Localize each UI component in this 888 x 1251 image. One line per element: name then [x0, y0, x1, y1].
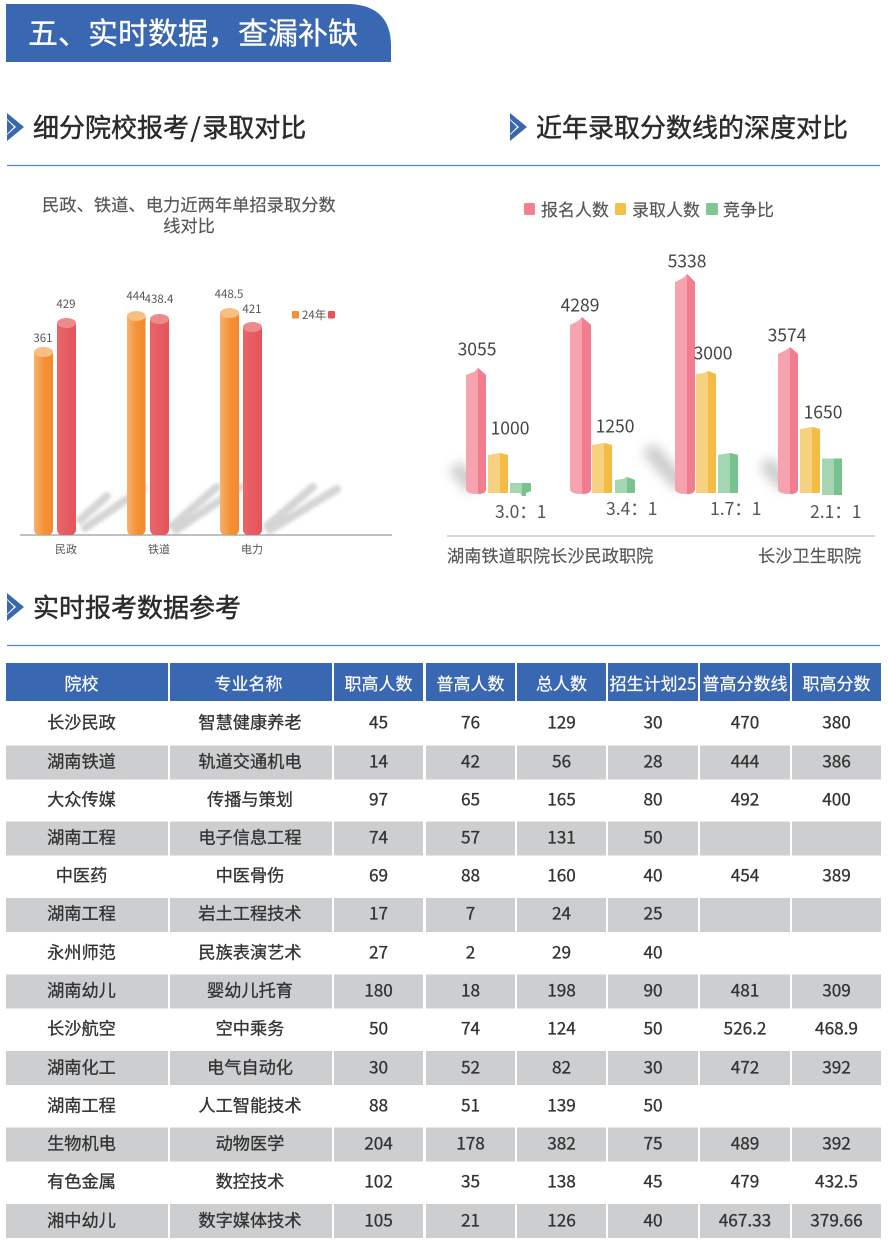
group: 湖南铁道职院: 1000	[491, 416, 529, 441]
table header: 总人数	[536, 670, 587, 695]
group: 长沙卫生职院	[768, 323, 862, 524]
row: 大众传媒: 165	[547, 786, 576, 811]
table header: 职高人数	[344, 670, 412, 695]
row: 湖南化工	[6, 1051, 881, 1085]
row: 大众传媒: 492	[731, 786, 759, 811]
row: 湖南铁道: 14	[369, 748, 388, 773]
group: 民政	[33, 296, 77, 557]
row: 生物机电: 382	[547, 1130, 576, 1155]
row: 永州师范: 永州师范	[47, 939, 116, 964]
row: 永州师范: 29	[552, 939, 571, 964]
group: 民政: 民政	[55, 541, 77, 557]
title banner: 五、实时数据，查漏补缺	[28, 9, 358, 53]
row: 长沙民政: 30	[643, 709, 663, 734]
group: 湖南铁道职院: 3055	[458, 337, 496, 362]
row: 中医药: 69	[369, 862, 388, 887]
table header	[6, 663, 881, 701]
row: 有色金属: 数控技术	[216, 1168, 284, 1193]
group: 长沙卫生职院: 3574	[768, 323, 807, 348]
row: 有色金属: 45	[643, 1168, 663, 1193]
category labels: 长沙卫生职院	[758, 542, 861, 567]
row: 湖南幼儿: 198	[547, 977, 576, 1002]
group: 电力: 电力	[241, 541, 263, 557]
row: 长沙航空: 468.9	[815, 1015, 858, 1040]
row: 湖南铁道: 28	[643, 748, 663, 773]
row: 湖南工程 电子信息工程: 电子信息工程	[198, 824, 302, 849]
row: 湖南幼儿: 481	[731, 977, 759, 1002]
row: 湘中幼儿: 467.33	[719, 1207, 771, 1232]
legend	[292, 307, 335, 323]
row: 中医药: 中医药	[56, 862, 107, 887]
row: 湖南铁道: 386	[822, 748, 851, 773]
row: 生物机电: 75	[643, 1130, 663, 1155]
row: 湖南化工: 30	[643, 1054, 663, 1079]
row: 湖南工程 人工智能技术	[47, 1092, 663, 1117]
bar chart: 报名人数与录取人数	[447, 249, 875, 567]
row: 湖南幼儿: 湖南幼儿	[47, 977, 116, 1002]
row: 生物机电: 生物机电	[47, 1130, 116, 1155]
row: 湖南工程 人工智能技术: 人工智能技术	[198, 1092, 302, 1117]
row: 湖南幼儿: 309	[822, 977, 851, 1002]
row: 有色金属: 35	[461, 1168, 480, 1193]
row: 湖南工程 岩土工程技术	[6, 898, 881, 932]
row: 长沙民政	[47, 709, 851, 734]
row: 长沙航空: 50	[643, 1015, 663, 1040]
row: 生物机电: 489	[731, 1130, 759, 1155]
category labels	[447, 542, 861, 567]
legend: right chart	[524, 196, 774, 221]
row: 生物机电: 178	[456, 1130, 485, 1155]
row: 大众传媒: 97	[369, 786, 388, 811]
row: 有色金属: 432.5	[815, 1168, 858, 1193]
row: 永州师范: 27	[369, 939, 388, 964]
row: 湖南工程 电子信息工程: 131	[547, 824, 576, 849]
group: 民政: 429	[56, 296, 76, 312]
left chart title: 民政、铁道、电力近两年单招录取分数	[42, 191, 336, 216]
row: 长沙航空: 124	[547, 1015, 576, 1040]
row: 湖南工程 岩土工程技术: 17	[369, 900, 388, 925]
row: 湘中幼儿: 126	[547, 1207, 576, 1232]
bar chart: 单招录取分数线对比	[20, 286, 392, 557]
group: 湖南铁道职院: 3.0：1	[495, 499, 547, 524]
title banner	[6, 4, 391, 62]
legend: right chart: 录取人数	[632, 196, 700, 221]
row: 湘中幼儿: 379.66	[810, 1207, 863, 1232]
group: 电力	[215, 286, 263, 557]
row: 湖南化工: 30	[369, 1054, 388, 1079]
row: 湖南幼儿: 90	[643, 977, 663, 1002]
row: 生物机电: 204	[364, 1130, 393, 1155]
row: 湖南幼儿: 180	[364, 977, 393, 1002]
group: 长沙卫生职院: 2.1：1	[810, 499, 862, 524]
row: 有色金属: 有色金属	[47, 1168, 116, 1193]
data table	[6, 663, 881, 1238]
row: 湖南工程 人工智能技术: 湖南工程	[47, 1092, 116, 1117]
row: 湘中幼儿: 湘中幼儿	[47, 1207, 116, 1232]
row: 大众传媒: 400	[822, 786, 851, 811]
group: 铁道: 444	[126, 288, 146, 304]
group: 长沙民政职院: 3.4：1	[606, 496, 658, 521]
row: 大众传媒: 80	[643, 786, 663, 811]
row: 长沙航空: 50	[369, 1015, 388, 1040]
row: 长沙民政: 470	[731, 709, 759, 734]
row: 湖南工程 电子信息工程	[6, 822, 881, 856]
table header: 专业名称	[214, 670, 282, 695]
row: 有色金属	[47, 1168, 858, 1193]
row: 长沙民政: 45	[369, 709, 388, 734]
row: 湖南工程 电子信息工程: 湖南工程	[47, 824, 116, 849]
row: 湖南铁道: 444	[731, 748, 759, 773]
row: 永州师范: 40	[643, 939, 663, 964]
group: 铁道: 438.4	[145, 291, 174, 307]
row: 湖南工程 人工智能技术: 51	[461, 1092, 480, 1117]
group: 长沙民政职院: 4289	[561, 293, 599, 318]
row: 中医药: 389	[822, 862, 851, 887]
row: 湖南工程 岩土工程技术: 岩土工程技术	[198, 900, 302, 925]
row: 有色金属: 102	[364, 1168, 393, 1193]
row: 湖南化工: 472	[731, 1054, 759, 1079]
category labels: 湖南铁道职院长沙民政职院	[447, 542, 653, 567]
row: 湖南工程 岩土工程技术: 25	[643, 900, 663, 925]
row: 大众传媒: 大众传媒	[47, 786, 116, 811]
row: 永州师范: 2	[466, 939, 475, 964]
row: 湖南化工: 392	[822, 1054, 851, 1079]
table header: 招生计划25	[610, 670, 696, 695]
row: 永州师范	[47, 939, 663, 964]
group: 第三所职院: 5338	[668, 249, 706, 274]
row: 长沙航空: 74	[461, 1015, 480, 1040]
left chart title	[42, 191, 336, 237]
chart shadows	[455, 448, 786, 488]
row: 大众传媒: 传播与策划	[207, 786, 293, 811]
row: 湖南幼儿: 婴幼儿托育	[207, 977, 293, 1002]
row: 有色金属: 138	[547, 1168, 576, 1193]
row: 湖南幼儿: 18	[461, 977, 480, 1002]
row: 大众传媒: 65	[461, 786, 480, 811]
group: 长沙卫生职院: 1650	[804, 400, 842, 425]
row: 长沙航空: 526.2	[724, 1015, 766, 1040]
group: 铁道	[126, 288, 174, 557]
row: 湘中幼儿: 21	[461, 1207, 480, 1232]
row: 长沙民政: 129	[547, 709, 576, 734]
row: 湖南工程 电子信息工程: 57	[461, 824, 480, 849]
row: 湖南铁道: 湖南铁道	[47, 748, 116, 773]
row: 中医药: 40	[643, 862, 663, 887]
row: 湖南化工: 52	[461, 1054, 480, 1079]
group: 第三所职院: 3000	[694, 341, 732, 366]
row: 长沙航空: 长沙航空	[47, 1015, 116, 1040]
row: 大众传媒	[47, 786, 851, 811]
row: 湘中幼儿	[6, 1204, 881, 1238]
table header: 职高分数	[802, 670, 870, 695]
row: 湖南工程 电子信息工程: 50	[643, 824, 663, 849]
table header: 普高分数线	[702, 670, 788, 695]
group: 铁道: 铁道	[148, 541, 170, 557]
row: 中医药	[56, 862, 851, 887]
row: 湖南化工: 电气自动化	[207, 1054, 293, 1079]
table header: 院校	[64, 670, 98, 695]
group: 长沙民政职院	[561, 293, 658, 521]
chart shadows	[80, 487, 337, 530]
row: 湖南工程 岩土工程技术: 24	[552, 900, 571, 925]
row: 长沙航空	[47, 1015, 858, 1040]
row: 湖南铁道: 轨道交通机电	[198, 748, 302, 773]
row: 湖南工程 人工智能技术: 139	[547, 1092, 576, 1117]
row: 湖南铁道	[6, 746, 881, 780]
group: 第三所职院	[668, 249, 762, 521]
row: 永州师范: 民族表演艺术	[198, 939, 302, 964]
table header: 普高人数	[436, 670, 504, 695]
row: 中医药: 454	[731, 862, 759, 887]
left chart title: 线对比	[163, 212, 215, 237]
row: 生物机电	[6, 1128, 881, 1162]
row: 湖南铁道: 56	[552, 748, 571, 773]
legend: right chart: 报名人数	[541, 196, 609, 221]
group: 民政: 361	[33, 330, 53, 346]
row: 湖南化工: 湖南化工	[47, 1054, 116, 1079]
row: 长沙民政: 长沙民政	[47, 709, 116, 734]
row: 湖南工程 电子信息工程: 74	[369, 824, 388, 849]
row: 湖南工程 人工智能技术: 88	[369, 1092, 388, 1117]
row: 有色金属: 479	[731, 1168, 759, 1193]
row: 长沙航空: 空中乘务	[216, 1015, 284, 1040]
legend: 24年	[302, 307, 326, 323]
group: 湖南铁道职院	[458, 337, 547, 524]
row: 湘中幼儿: 105	[364, 1207, 393, 1232]
row: 湘中幼儿: 数字媒体技术	[198, 1207, 302, 1232]
row: 湖南幼儿	[6, 974, 881, 1008]
heading: 细分院校报考/录取对比: 细分院校报考/录取对比	[33, 108, 306, 145]
group: 长沙民政职院: 1250	[596, 414, 634, 439]
heading: 实时报考数据参考: 实时报考数据参考	[33, 588, 241, 625]
row: 生物机电: 动物医学	[216, 1130, 284, 1155]
row: 中医药: 160	[547, 862, 576, 887]
axis	[447, 535, 875, 537]
row: 湖南工程 人工智能技术: 50	[643, 1092, 663, 1117]
group: 第三所职院: 1.7：1	[710, 496, 762, 521]
group: 电力: 421	[242, 301, 262, 317]
row: 生物机电: 392	[822, 1130, 851, 1155]
row: 长沙民政: 380	[822, 709, 851, 734]
row: 长沙民政: 智慧健康养老	[198, 709, 302, 734]
group: 电力: 448.5	[215, 286, 243, 302]
legend: right chart: 竞争比	[723, 196, 774, 221]
row: 湖南工程 岩土工程技术: 7	[466, 900, 475, 925]
axis	[20, 534, 392, 536]
row: 中医药: 中医骨伤	[216, 862, 284, 887]
row: 湖南铁道: 42	[461, 748, 480, 773]
row: 中医药: 88	[461, 862, 480, 887]
row: 长沙民政: 76	[461, 709, 480, 734]
row: 湘中幼儿: 40	[643, 1207, 663, 1232]
row: 湖南化工: 82	[552, 1054, 571, 1079]
row: 湖南工程 岩土工程技术: 湖南工程	[47, 900, 116, 925]
heading: 近年录取分数线的深度对比: 近年录取分数线的深度对比	[536, 108, 848, 145]
